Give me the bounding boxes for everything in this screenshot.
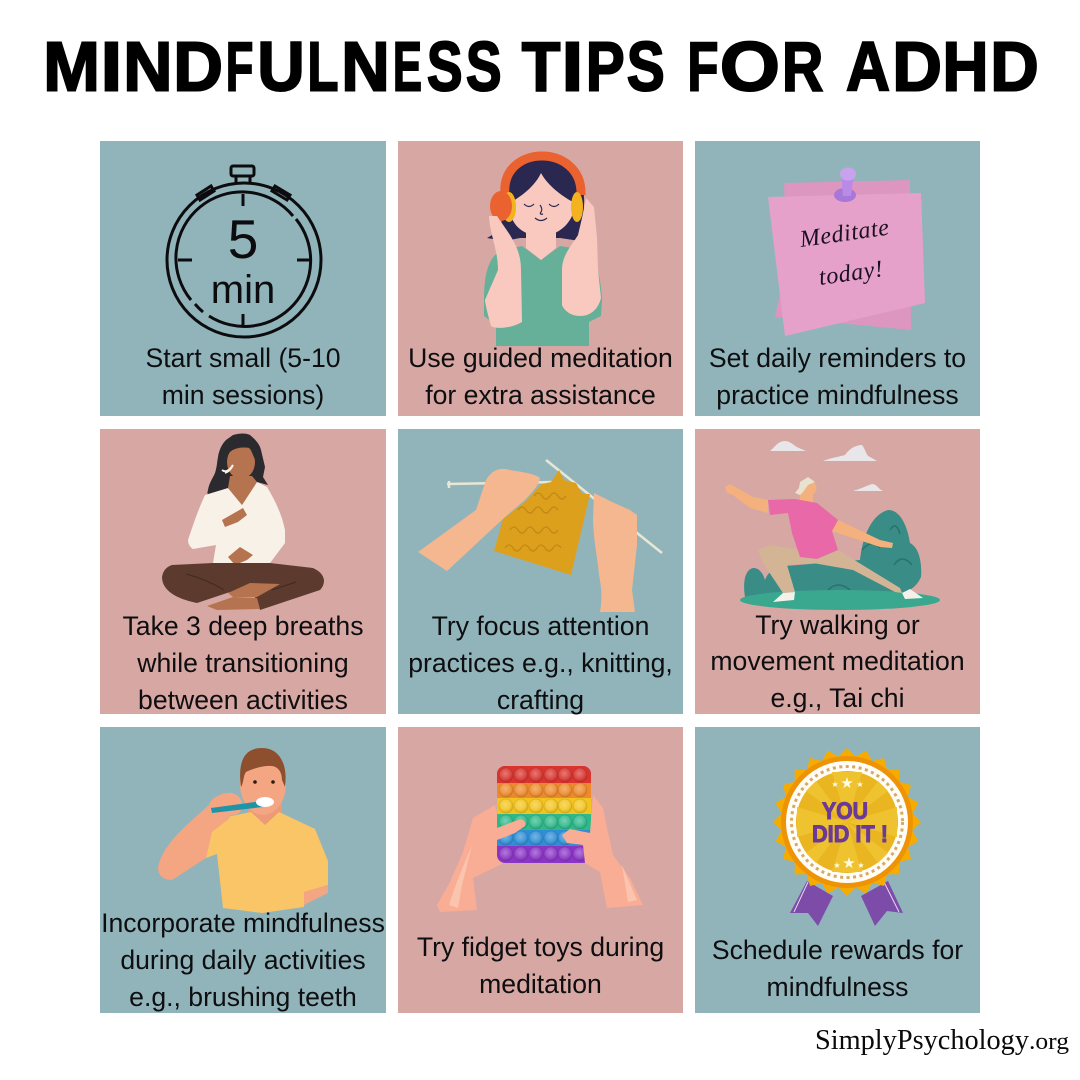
icon: woman with headphones xyxy=(484,156,602,346)
title: M xyxy=(43,28,100,106)
caption: for extra assistance xyxy=(425,380,656,410)
caption: Incorporate mindfulness xyxy=(101,908,385,938)
caption: Try focus attention xyxy=(432,611,649,641)
caption: Set daily reminders to xyxy=(709,343,966,373)
panel: movement meditation xyxy=(695,429,980,714)
caption: during daily activities xyxy=(120,945,366,975)
title: A xyxy=(846,28,890,106)
title: D xyxy=(990,28,1039,106)
caption: while transitioning xyxy=(136,648,349,678)
title: H xyxy=(942,28,988,106)
icon: rainbow pop-it held in hands xyxy=(437,766,643,912)
source credit: .org xyxy=(1029,1029,1069,1055)
icon: woman breathing cross-legged xyxy=(162,434,324,610)
icon: 5 minute stopwatch: min xyxy=(211,268,275,312)
caption: min sessions) xyxy=(162,380,324,410)
title: I xyxy=(100,28,122,106)
title: I xyxy=(562,28,583,106)
panel: focus attention xyxy=(398,429,683,715)
caption: practices e.g., knitting, xyxy=(408,648,673,678)
icon: pinned sticky note: Meditate xyxy=(797,215,891,253)
icon: man brushing teeth xyxy=(158,748,328,913)
panel: start small xyxy=(100,141,386,416)
panel: daily reminders xyxy=(695,141,980,416)
icon: 5 minute stopwatch xyxy=(167,166,321,337)
source credit: SimplyPsychology xyxy=(815,1025,1029,1056)
caption: Try fidget toys during xyxy=(417,932,664,962)
caption: mindfulness xyxy=(767,972,908,1002)
icon: 5 minute stopwatch: 5 xyxy=(228,208,258,270)
title: D xyxy=(173,28,223,106)
panel: fidget toys xyxy=(398,727,683,1013)
title: L xyxy=(307,28,338,106)
caption: meditation xyxy=(479,969,602,999)
panel: deep breaths xyxy=(100,429,386,715)
panel: daily activities xyxy=(100,727,386,1013)
title: N xyxy=(341,28,390,106)
caption: Take 3 deep breaths xyxy=(122,611,364,641)
caption: Schedule rewards for xyxy=(712,935,963,965)
title: S xyxy=(466,28,502,106)
icon: you did it rosette badge: ★ xyxy=(856,780,864,789)
icon: you did it rosette badge: ★ xyxy=(840,774,854,792)
caption: Try walking or xyxy=(755,610,920,640)
caption: crafting xyxy=(497,685,584,715)
title: R xyxy=(782,28,823,106)
caption: practice mindfulness xyxy=(716,380,959,410)
title: T xyxy=(522,28,560,106)
title: D xyxy=(892,28,942,106)
title: N xyxy=(123,28,172,106)
icon: you did it rosette badge: ★ xyxy=(842,854,856,872)
title: O xyxy=(720,28,780,106)
icon: you did it rosette badge: ★ xyxy=(857,861,865,870)
icon: you did it rosette badge: ★ xyxy=(831,780,839,789)
caption: e.g., Tai chi xyxy=(770,683,905,713)
icon: you did it rosette badge: YOU xyxy=(822,798,868,825)
caption: e.g., brushing teeth xyxy=(129,982,357,1012)
panel: rewards xyxy=(695,727,980,1013)
icon: tai chi figure in park xyxy=(725,441,940,610)
icon: you did it rosette badge: DID IT ! xyxy=(812,821,888,848)
panel: guided meditation xyxy=(398,141,683,416)
title: S xyxy=(427,28,463,106)
title: F xyxy=(226,28,253,106)
caption: Start small (5-10 xyxy=(145,343,341,373)
title: S xyxy=(627,28,665,106)
title: P xyxy=(586,28,625,106)
icon: you did it rosette badge: ★ xyxy=(833,861,841,870)
icon: you did it rosette badge xyxy=(773,748,921,926)
caption: Use guided meditation xyxy=(408,343,673,373)
icon: pinned sticky note: today! xyxy=(817,256,885,291)
caption: between activities xyxy=(138,685,348,715)
icon: pinned sticky note xyxy=(768,168,925,336)
title: F xyxy=(687,28,718,106)
caption: movement meditation xyxy=(710,646,965,676)
title: U xyxy=(257,28,305,106)
icon: hands knitting xyxy=(418,460,662,612)
title: E xyxy=(393,28,422,106)
